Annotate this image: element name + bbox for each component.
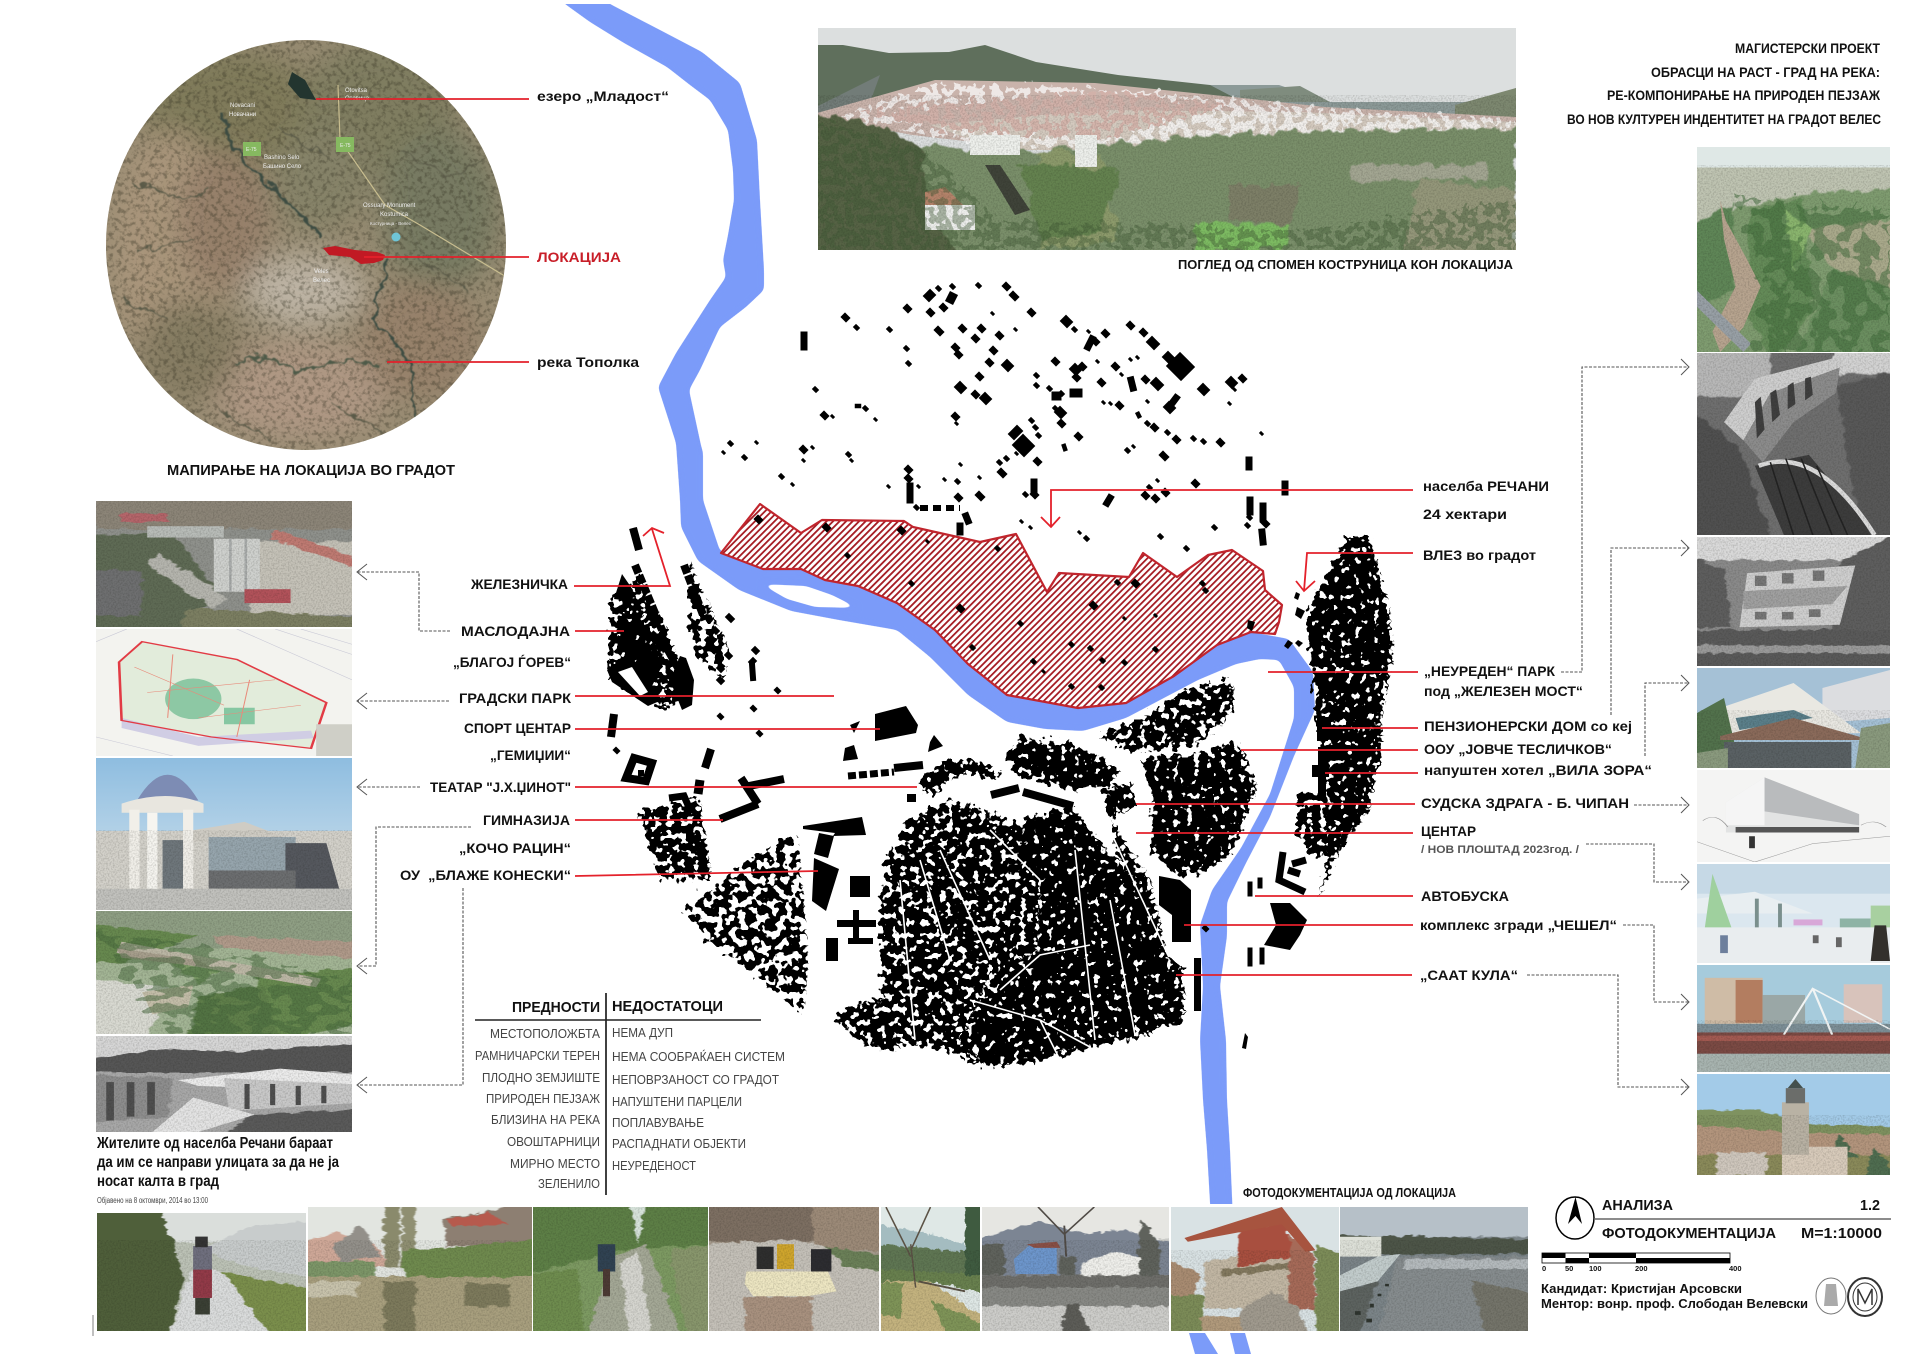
disadvantages list: НЕУРЕДЕНОСТ <box>612 1159 696 1173</box>
newspaper headline <box>96 1135 339 1205</box>
photo: flooded greenhouses <box>1340 1207 1528 1331</box>
satellite location map: Veles <box>314 269 329 275</box>
photo: oil factory <box>96 501 352 627</box>
satellite location map: Bashino Selo <box>264 155 300 161</box>
project title: МАГИСТЕРСКИ ПРОЕКТ <box>1735 40 1880 56</box>
right map labels: „НЕУРЕДЕН“ ПАРК <box>1424 663 1555 679</box>
right map labels: ПЕНЗИОНЕРСКИ ДОМ со кеј <box>1424 718 1632 734</box>
small margin tick <box>92 1315 94 1336</box>
disadvantages list: РАСПАДНАТИ ОБЈЕКТИ <box>612 1137 746 1151</box>
photo: theatre <box>96 758 352 910</box>
western quarter <box>607 528 784 880</box>
photo: old houses by river <box>1697 537 1890 666</box>
right map labels: комплекс згради „ЧЕШЕЛ“ <box>1420 917 1617 933</box>
project title: РЕ-КОМПОНИРАЊЕ НА ПРИРОДЕН ПЕЈЗАЖ <box>1607 87 1880 103</box>
satellite location map: Otovitsa <box>345 88 368 94</box>
left red leader lines <box>574 528 917 876</box>
locator map labels <box>316 88 669 370</box>
right map labels: населба РЕЧАНИ <box>1423 478 1549 494</box>
disadvantages list: ПОПЛАВУВАЊЕ <box>612 1116 704 1130</box>
scale bar: 100 <box>1589 1264 1602 1273</box>
left map labels <box>400 576 571 883</box>
title block: АНАЛИЗА <box>1602 1197 1673 1214</box>
photo: motorbike on flooded lane <box>533 1207 708 1331</box>
right map labels: ЦЕНТАР <box>1421 823 1476 839</box>
scale bar <box>1542 1253 1742 1273</box>
advantages list: ПЛОДНО ЗЕМЈИШТЕ <box>482 1071 600 1085</box>
right map labels: ООУ „ЈОВЧЕ ТЕСЛИЧКОВ“ <box>1424 741 1612 757</box>
right dashed arrows <box>1527 359 1689 1095</box>
hatched site Rechani <box>721 504 1282 708</box>
scale bar: 0 <box>1542 1264 1546 1273</box>
advantages and disadvantages table <box>475 993 785 1195</box>
photo: clock tower <box>1697 1074 1890 1175</box>
photo: woman in flood <box>97 1213 306 1331</box>
scale bar: 400 <box>1729 1264 1742 1273</box>
left map labels: МАСЛОДАЈНА <box>461 623 570 639</box>
title block: Кандидат: Кристијан Арсовски <box>1541 1281 1742 1296</box>
project title: ОБРАСЦИ НА РАСТ - ГРАД НА РЕКА: <box>1651 64 1880 80</box>
river Vardar <box>550 0 1315 1354</box>
advantages list: ЗЕЛЕНИЛО <box>538 1177 600 1191</box>
satellite location map: Новачани <box>229 112 256 118</box>
advantages list: МИРНО МЕСТО <box>510 1157 600 1171</box>
locator map labels: езеро „Младост“ <box>537 88 669 104</box>
right map labels <box>1420 478 1652 983</box>
north arrow <box>1556 1197 1594 1239</box>
locator map caption: МАПИРАЊЕ НА ЛОКАЦИЈА ВО ГРАДОТ <box>167 462 455 479</box>
right map labels: напуштен хотел „ВИЛА ЗОРА“ <box>1424 762 1652 778</box>
disadvantages list: НАПУШТЕНИ ПАРЦЕЛИ <box>612 1095 742 1109</box>
left map labels: „ГЕМИЏИИ“ <box>490 747 571 763</box>
satellite location map: E-75 <box>246 147 257 153</box>
newspaper headline: да им се направи улицата за да не ја <box>97 1154 339 1171</box>
right map labels: / НОВ ПЛОШТАД 2023год. / <box>1421 844 1579 856</box>
satellite location map <box>100 30 520 460</box>
sport centre and halls <box>843 706 943 761</box>
left map labels: ТЕАТАР "Ј.Х.ЏИНОТ" <box>430 779 571 795</box>
panorama caption: ПОГЛЕД ОД СПОМЕН КОСТРУНИЦА КОН ЛОКАЦИЈА <box>1178 257 1514 272</box>
disadvantages list <box>612 1026 785 1173</box>
scattered houses north <box>723 285 1285 688</box>
advantages and disadvantages table: НЕДОСТАТОЦИ <box>612 998 723 1015</box>
dense city fabric <box>684 537 1393 1065</box>
photo: rescue boat <box>709 1207 879 1331</box>
title block: Ментор: вонр. проф. Слободан Велевски <box>1541 1296 1808 1311</box>
right map labels: под „ЖЕЛЕЗЕН МОСТ“ <box>1424 683 1583 699</box>
photo: iron bridge <box>1697 353 1890 535</box>
newspaper headline: носат калта в град <box>97 1173 219 1190</box>
right map labels: АВТОБУСКА <box>1421 888 1509 904</box>
photo: school black and white <box>96 1036 352 1132</box>
satellite location map: Novacani <box>230 103 255 109</box>
title block: М=1:10000 <box>1801 1225 1882 1242</box>
disadvantages list: НЕПОВРЗАНОСТ СО ГРАДОТ <box>612 1073 779 1087</box>
advantages and disadvantages table: ПРЕДНОСТИ <box>512 999 600 1016</box>
left map labels: ГРАДСКИ ПАРК <box>459 690 571 706</box>
disadvantages list: НЕМА ДУП <box>612 1026 673 1040</box>
satellite location map: Башино Село <box>263 164 302 170</box>
photo: flooded pond houses <box>308 1207 532 1331</box>
photo: abandoned hotel <box>1697 668 1890 768</box>
photo: Cheshel buildings and bridge <box>1697 965 1890 1072</box>
satellite location map: Костурница - Велес <box>370 221 412 226</box>
satellite location map: Ossuary Monument <box>363 203 416 209</box>
title block <box>1541 1197 1891 1316</box>
photo: flooded blue house <box>982 1207 1169 1331</box>
right red leader lines <box>1041 490 1418 975</box>
photo: gymnasium aerial <box>96 911 352 1034</box>
locator map labels: река Тополка <box>537 354 639 370</box>
panorama photo <box>818 28 1516 250</box>
newspaper headline: Објавено на 8 октомври, 2014 во 13:00 <box>97 1196 208 1205</box>
photo: river valley aerial <box>1697 147 1890 352</box>
left dashed arrows <box>357 564 471 1093</box>
photo strip caption: ФОТОДОКУМЕНТАЦИЈА ОД ЛОКАЦИЈА <box>1243 1186 1456 1200</box>
figure-ground building map <box>607 285 1393 1065</box>
photo: brick house <box>1171 1207 1339 1331</box>
satellite location map: Kostumica <box>380 212 409 218</box>
disadvantages list: НЕМА СООБРАЌАЕН СИСТЕМ <box>612 1049 785 1064</box>
university seals <box>1816 1278 1882 1316</box>
advantages list: ПРИРОДЕН ПЕЈЗАЖ <box>486 1092 600 1106</box>
left map labels: ОУ „БЛАЖЕ КОНЕСКИ“ <box>400 867 571 883</box>
locator map labels: ЛОКАЦИЈА <box>537 249 621 265</box>
left map labels: ГИМНАЗИЈА <box>483 812 570 828</box>
advantages list: БЛИЗИНА НА РЕКА <box>491 1113 601 1127</box>
advantages list: РАМНИЧАРСКИ ТЕРЕН <box>475 1049 600 1063</box>
advantages list: МЕСТОПОЛОЖБТА <box>490 1027 601 1041</box>
title block: ФОТОДОКУМЕНТАЦИЈА <box>1602 1225 1776 1242</box>
scale bar: 200 <box>1635 1264 1648 1273</box>
right map labels: „СААТ КУЛА“ <box>1420 967 1518 983</box>
right map labels: 24 хектари <box>1423 506 1507 522</box>
satellite location map: E-75 <box>340 143 351 149</box>
left map labels: „БЛАГОЈ ЃОРЕВ“ <box>453 654 571 670</box>
left map labels: ЖЕЛЕЗНИЧКА <box>470 576 568 592</box>
newspaper headline: Жителите од населба Речани бараат <box>96 1135 333 1152</box>
right map labels: ВЛЕЗ во градот <box>1423 547 1536 563</box>
photo: court building sketch <box>1697 770 1890 862</box>
right map labels: СУДСКА ЗДРАГА - Б. ЧИПАН <box>1421 795 1629 811</box>
title block: 1.2 <box>1860 1197 1880 1214</box>
scale bar: 50 <box>1565 1264 1573 1273</box>
advantages list <box>475 1027 601 1191</box>
photo: orchard <box>881 1207 980 1331</box>
satellite location map: Отовица <box>345 96 370 102</box>
photo: city park plan <box>96 629 352 756</box>
left map labels: СПОРТ ЦЕНТАР <box>464 720 571 736</box>
left map labels: „КОЧО РАЦИН“ <box>459 840 571 856</box>
satellite location map: Велес <box>313 278 330 284</box>
project title <box>1567 40 1881 127</box>
photo: new square render <box>1697 864 1890 963</box>
advantages list: ОВОШТАРНИЦИ <box>507 1135 600 1149</box>
